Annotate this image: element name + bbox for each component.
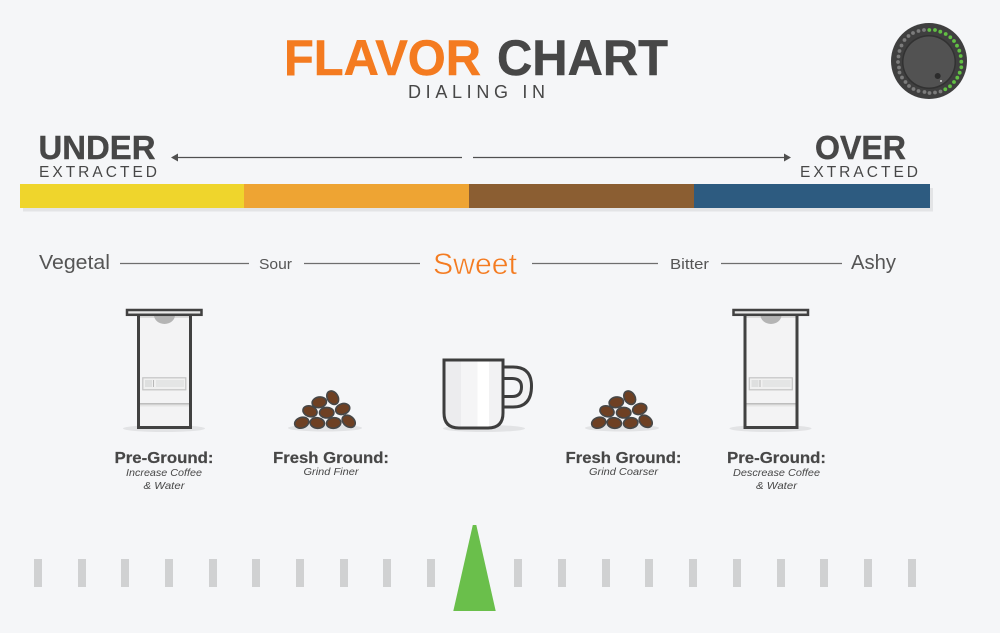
extraction color bar	[20, 184, 933, 212]
caption: fresh ground right: Fresh Ground:	[566, 450, 682, 467]
flavor scale: Ashy	[851, 252, 896, 274]
caption: pre-ground left: Pre-Ground:	[114, 450, 214, 467]
caption: fresh ground left: Fresh Ground:	[273, 450, 389, 467]
tick scale	[34, 559, 916, 587]
label: under extracted: EXTRACTED	[39, 164, 157, 181]
caption: pre-ground right	[727, 450, 826, 492]
caption: fresh ground right: Grind Coarser	[589, 466, 659, 478]
icon: dial	[891, 23, 967, 99]
caption: pre-ground right: Pre-Ground:	[727, 450, 826, 467]
subtitle: DIALING IN	[408, 82, 545, 102]
title	[284, 30, 668, 86]
flavor scale	[39, 248, 896, 281]
flavor scale: Vegetal	[39, 252, 110, 274]
label: over extracted: OVER	[815, 129, 906, 166]
flavor scale: Sweet	[433, 248, 518, 281]
caption: fresh ground left: Grind Finer	[304, 466, 359, 478]
icon: beans left	[288, 389, 362, 432]
caption: pre-ground right: Descrease Coffee	[733, 467, 820, 479]
title: CHART	[497, 30, 668, 86]
title: FLAVOR	[284, 30, 481, 86]
caption: fresh ground right	[566, 450, 682, 478]
icon: coffee bag right	[730, 310, 812, 432]
caption: pre-ground left: Increase Coffee	[126, 467, 202, 479]
caption: fresh ground left	[273, 450, 389, 478]
icon: beans right	[585, 389, 659, 432]
arrow: left	[171, 154, 462, 162]
label: over extracted: EXTRACTED	[800, 164, 918, 181]
flavor scale: Sour	[259, 256, 292, 273]
arrow: right	[473, 154, 791, 162]
icon: coffee bag left	[123, 310, 205, 432]
label: over extracted	[800, 129, 918, 181]
flavor scale: Bitter	[670, 256, 709, 273]
caption: pre-ground left: & Water	[144, 480, 185, 492]
caption: pre-ground left	[114, 450, 214, 492]
icon: mug	[443, 360, 532, 432]
pointer triangle	[453, 525, 496, 611]
label: under extracted: UNDER	[38, 129, 156, 166]
caption: pre-ground right: & Water	[756, 480, 798, 492]
